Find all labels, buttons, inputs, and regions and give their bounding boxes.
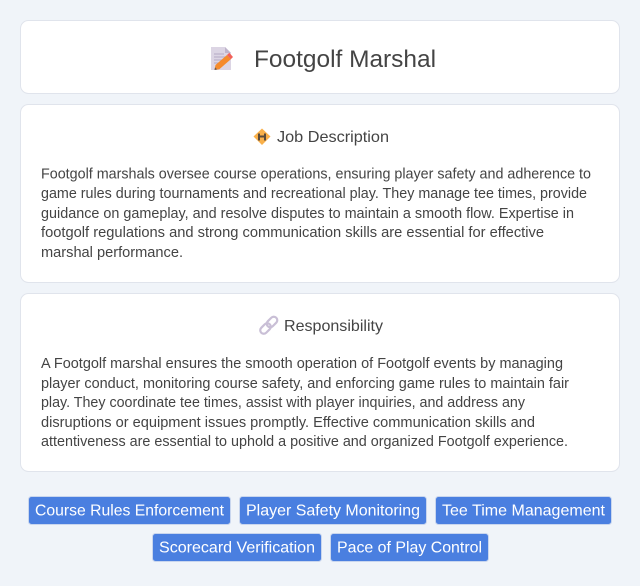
tag: tee time management (436, 496, 612, 524)
text: responsibility: play. They coordinate tee times, assist with player inquiries, and address any (41, 395, 526, 411)
text: job description (41, 166, 591, 261)
tag: course rules enforcement: Course Rules Enforcement (35, 502, 225, 520)
tag: scorecard verification (152, 534, 322, 562)
tag: pace of play control (330, 534, 488, 562)
tag: pace of play control: Pace of Play Control (337, 540, 482, 556)
heading: responsibility: Responsibility (284, 318, 383, 335)
tag: course rules enforcement (28, 496, 230, 524)
text: job description: Footgolf marshals oversee course operations, ensuring player safety and adherence to (41, 166, 591, 182)
text: responsibility (41, 356, 569, 450)
tag: tee time management: Tee Time Management (442, 502, 606, 520)
tag: player safety monitoring (240, 496, 426, 524)
panel: responsibility (20, 294, 620, 472)
text: job description: footgolf regulations and strong communication skills are essential for effective (41, 225, 544, 241)
text: job description: marshal performance. (41, 245, 183, 261)
tag: scorecard verification: Scorecard Verification (159, 540, 315, 556)
icon: diamond sign (254, 128, 270, 145)
panel: title (20, 20, 620, 94)
text: responsibility: A Footgolf marshal ensures the smooth operation of Footgolf events by managing (41, 356, 563, 372)
icon: document with pencil (211, 47, 233, 70)
text: responsibility: attentiveness are essential to uphold a positive and organized Footgolf experience. (41, 434, 568, 450)
title: Footgolf Marshal (254, 46, 436, 73)
text: job description: game rules during tournaments and recreational play. They manage tee times, provide (41, 186, 587, 202)
heading: job description: Job Description (277, 129, 389, 146)
panel: job description (20, 104, 620, 282)
text: responsibility: disruptions or equipment issues promptly. Effective communication skills and (41, 415, 535, 431)
text: job description: guidance on gameplay, and resolve disputes to maintain a smooth flow. Expertise in (41, 206, 574, 222)
icon: chain link (259, 315, 279, 335)
text: responsibility: player conduct, monitoring course safety, and enforcing game rules to maintain fair (41, 376, 569, 392)
tag: player safety monitoring: Player Safety Monitoring (246, 502, 420, 520)
